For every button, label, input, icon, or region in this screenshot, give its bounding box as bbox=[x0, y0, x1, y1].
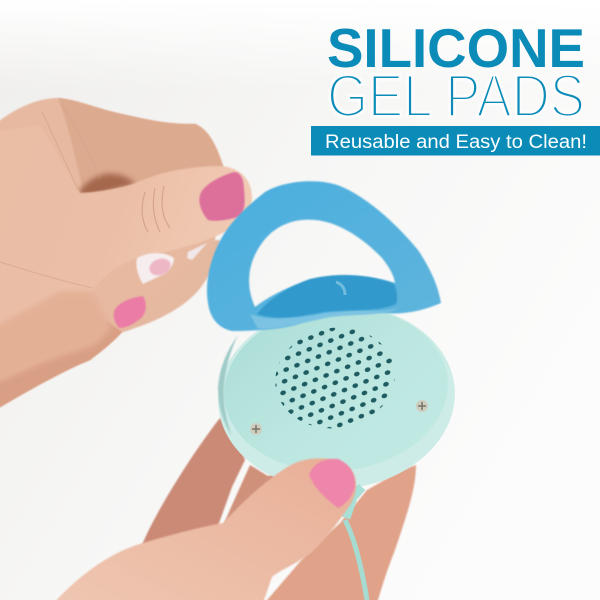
banner bbox=[311, 126, 600, 156]
knuckle creases bbox=[0, 105, 170, 288]
speaker grille holes bbox=[267, 318, 403, 438]
title bbox=[327, 18, 585, 130]
screw left bbox=[250, 423, 262, 435]
banner text: Reusable and Easy to Clean! bbox=[325, 132, 587, 153]
finger: back right bbox=[250, 465, 416, 600]
device: round mint speaker bbox=[212, 297, 461, 600]
palm and wrist bbox=[0, 98, 224, 425]
hand: upper left holding pad bbox=[0, 98, 252, 425]
crease shadow under index bbox=[78, 174, 136, 199]
nail: pink thumb bbox=[199, 172, 245, 221]
thumb: lower bbox=[40, 458, 356, 600]
silicone gel pad bbox=[207, 181, 441, 331]
left edge shading bbox=[218, 335, 238, 436]
index finger bbox=[58, 98, 224, 198]
screw right bbox=[416, 400, 428, 412]
pad highlight lip bbox=[250, 308, 400, 329]
nail: pink lower thumb bbox=[309, 459, 355, 508]
cord bbox=[345, 487, 367, 600]
finger: middle bbox=[222, 465, 300, 535]
lower fingers behind thumb bbox=[92, 240, 220, 334]
hole glare bbox=[336, 282, 345, 295]
palm lower shade bbox=[0, 322, 122, 425]
device face bbox=[217, 298, 455, 480]
finger: back left bbox=[142, 418, 245, 545]
thumb bbox=[0, 125, 252, 345]
hand: lower holding device bbox=[142, 418, 416, 600]
nail: pink lower finger bbox=[114, 296, 146, 328]
title line: silicone: SILICONE bbox=[327, 18, 585, 79]
nail: floral bbox=[136, 243, 207, 284]
device rim bbox=[212, 297, 461, 497]
pad lower limb bbox=[257, 275, 397, 318]
palm shade below thumb bbox=[0, 292, 112, 395]
pad outer ring bbox=[207, 181, 441, 331]
